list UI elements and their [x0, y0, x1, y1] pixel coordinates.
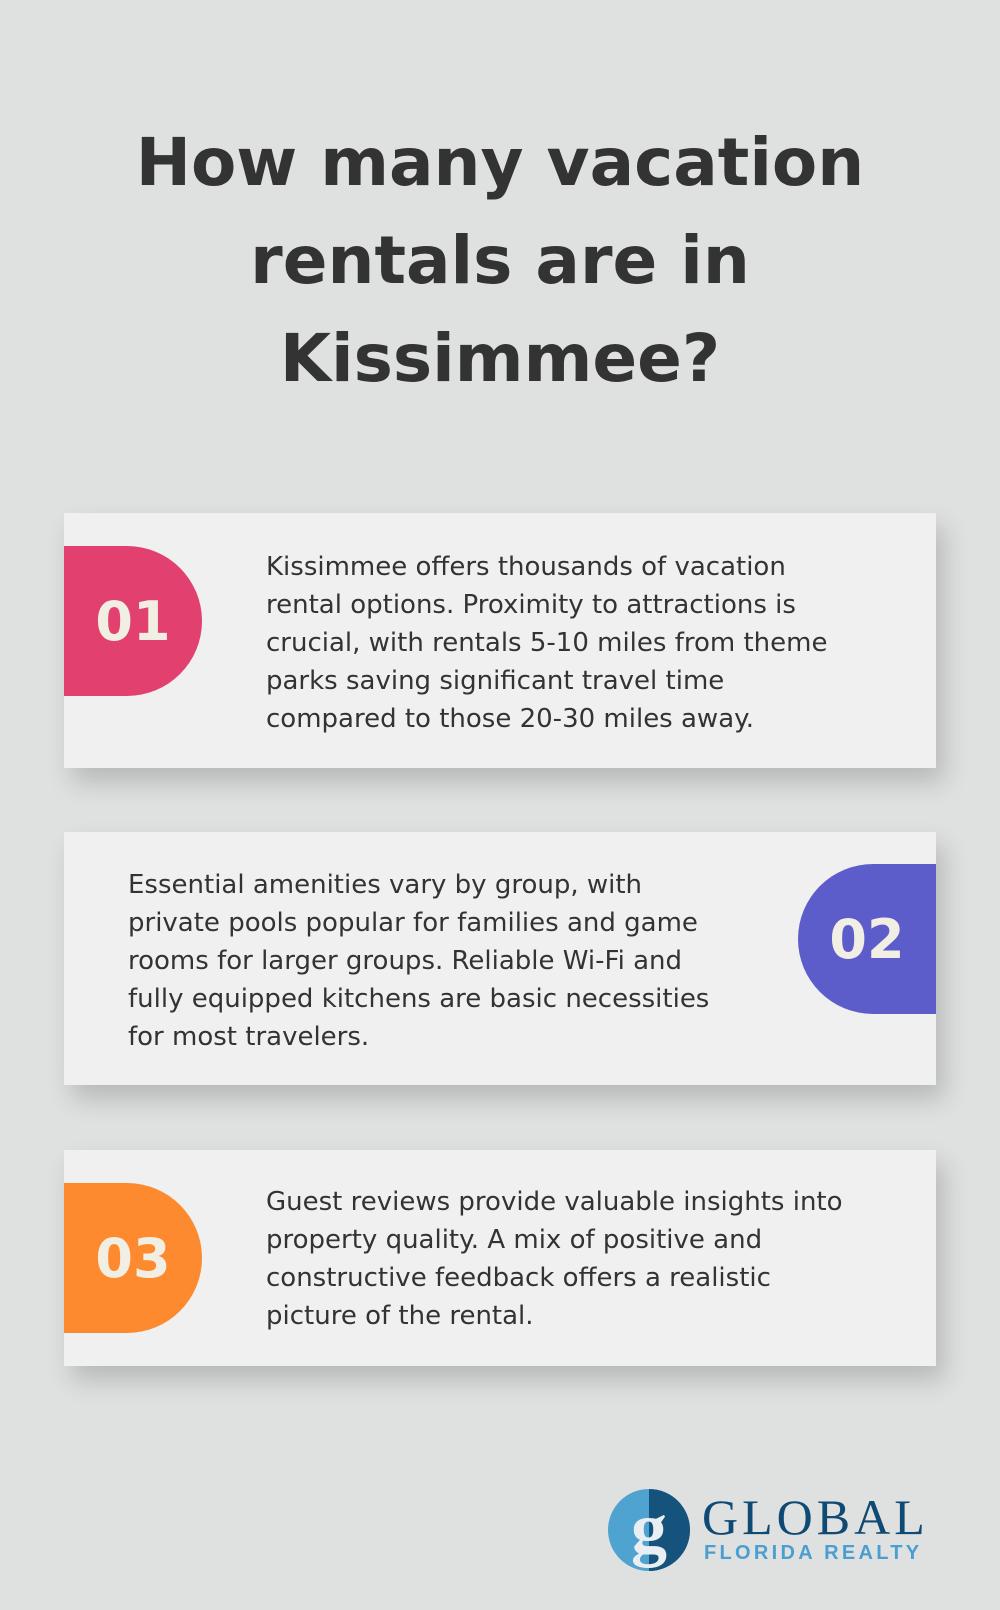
- badge 03: [64, 1183, 202, 1333]
- title: Kissimmee?: [280, 320, 720, 397]
- panel: card 2: [64, 832, 936, 1085]
- panel: card 1: [64, 513, 936, 768]
- icon: logo circle: [608, 1488, 690, 1571]
- text 3: Guest reviews provide valuable insights into property quality. A mix of positive and constructive feedback offers a realistic picture of the rental.: [266, 1187, 843, 1331]
- logo: FLORIDA REALTY: [704, 1542, 922, 1564]
- badge 02: [798, 864, 936, 1014]
- badge 01: [64, 546, 202, 696]
- logo: [608, 1488, 929, 1571]
- panel: card 3: [64, 1150, 936, 1366]
- logo text: GLOBAL: [702, 1489, 929, 1545]
- text 2: Essential amenities vary by group, with private pools popular for families and game rooms for larger groups. Reliable Wi-Fi and fully equipped kitchens are basic necessities for most travelers.: [128, 870, 709, 1052]
- title: [136, 124, 864, 397]
- icon: logo circle: g: [631, 1488, 667, 1568]
- text 1: Kissimmee offers thousands of vacation rental options. Proximity to attractions is crucial, with rentals 5-10 miles from theme parks saving significant travel time compared to those 20-30 miles away.: [266, 552, 827, 734]
- badge 01: 01: [95, 590, 171, 652]
- badge 02: 02: [829, 908, 905, 970]
- badge 03: 03: [95, 1226, 171, 1290]
- title: rentals are in: [250, 222, 750, 299]
- title: How many vacation: [136, 124, 864, 201]
